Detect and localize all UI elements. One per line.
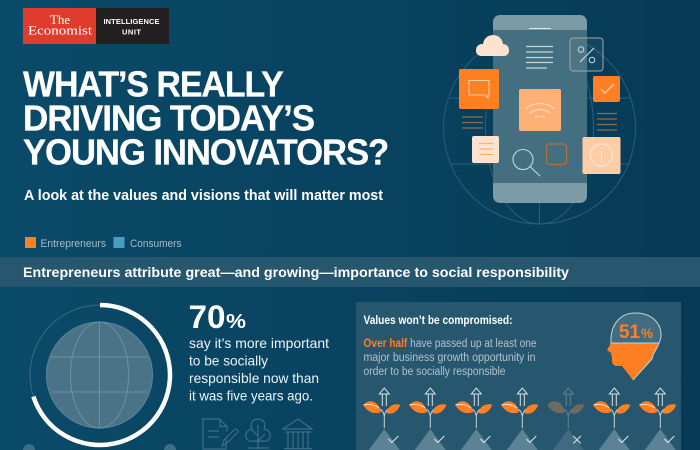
icon: head with 51%: 51 bbox=[619, 322, 640, 343]
title: WHAT’S REALLY bbox=[23, 65, 283, 105]
title: YOUNG INNOVATORS? bbox=[23, 133, 388, 173]
logo: The Economist Intelligence Unit: UNIT bbox=[122, 28, 141, 36]
icon: check bbox=[593, 76, 620, 102]
stat description: say it’s more important bbox=[189, 335, 329, 351]
sprout 4 bbox=[501, 388, 538, 450]
lines right bbox=[597, 114, 617, 130]
icon: tree bbox=[246, 419, 270, 449]
legend: Entrepreneurs bbox=[40, 238, 106, 250]
stat: 70%: % bbox=[226, 311, 246, 333]
lines left bbox=[462, 117, 483, 128]
title: DRIVING TODAY’S bbox=[23, 98, 314, 139]
legend bbox=[25, 237, 182, 250]
icon: wifi bbox=[519, 89, 561, 131]
sprouts row bbox=[363, 388, 676, 450]
icon: chat bbox=[459, 69, 499, 109]
panel: values won't be compromised bbox=[356, 302, 681, 450]
icon: globe bbox=[46, 322, 152, 428]
icon: magnifier bbox=[513, 150, 540, 176]
icon: document and pen bbox=[203, 419, 238, 449]
logo: The Economist Intelligence Unit: INTELLIGENCE bbox=[104, 17, 160, 26]
icon: head with 51%: % bbox=[641, 325, 654, 341]
stat description: to be socially bbox=[189, 352, 268, 368]
panel text: major business growth opportunity in bbox=[364, 352, 536, 364]
sprout 2 bbox=[409, 388, 446, 450]
logo: The Economist Intelligence Unit: The bbox=[50, 12, 70, 27]
panel text: order to be socially responsible bbox=[364, 366, 506, 378]
stat description: responsible now than bbox=[189, 370, 319, 386]
sprout 6 bbox=[593, 388, 630, 450]
panel heading: Values won’t be compromised: bbox=[364, 315, 512, 327]
icon: document bbox=[472, 136, 499, 163]
icon: outline square bbox=[546, 144, 566, 164]
legend: Consumers bbox=[130, 238, 182, 250]
phone body bbox=[493, 15, 587, 203]
chart: 70% ring around globe bbox=[23, 305, 176, 450]
panel text bbox=[364, 338, 536, 378]
globe outline behind phone bbox=[444, 32, 636, 224]
icon: cloud bbox=[476, 35, 509, 56]
text lines in phone bbox=[526, 46, 553, 68]
section band heading: Entrepreneurs attribute great—and growing—importance to social responsibility bbox=[23, 264, 569, 280]
sprout 5: wilted with cross bbox=[547, 388, 584, 450]
section band heading bbox=[0, 257, 700, 287]
subtitle: A look at the values and visions that will matter most bbox=[24, 187, 383, 204]
title bbox=[23, 65, 388, 173]
sprout 1 bbox=[363, 388, 400, 450]
sprout 3 bbox=[455, 388, 492, 450]
panel text: Over half have passed up at least one bbox=[364, 338, 536, 350]
logo: The Economist Intelligence Unit: Economist bbox=[28, 22, 92, 38]
stat description bbox=[189, 335, 329, 404]
icon: institution building bbox=[283, 419, 312, 448]
icon: head with 51% bbox=[607, 313, 661, 380]
icon: percent bbox=[570, 38, 603, 71]
stat description: it was five years ago. bbox=[189, 388, 313, 404]
stat: 70%: 70 bbox=[188, 299, 226, 335]
icon: info bbox=[582, 137, 620, 174]
sprout 7 bbox=[639, 388, 676, 450]
stat: 70% bbox=[188, 299, 246, 335]
logo: The Economist Intelligence Unit bbox=[23, 8, 169, 44]
illustration: phone with app icons bbox=[444, 15, 636, 224]
